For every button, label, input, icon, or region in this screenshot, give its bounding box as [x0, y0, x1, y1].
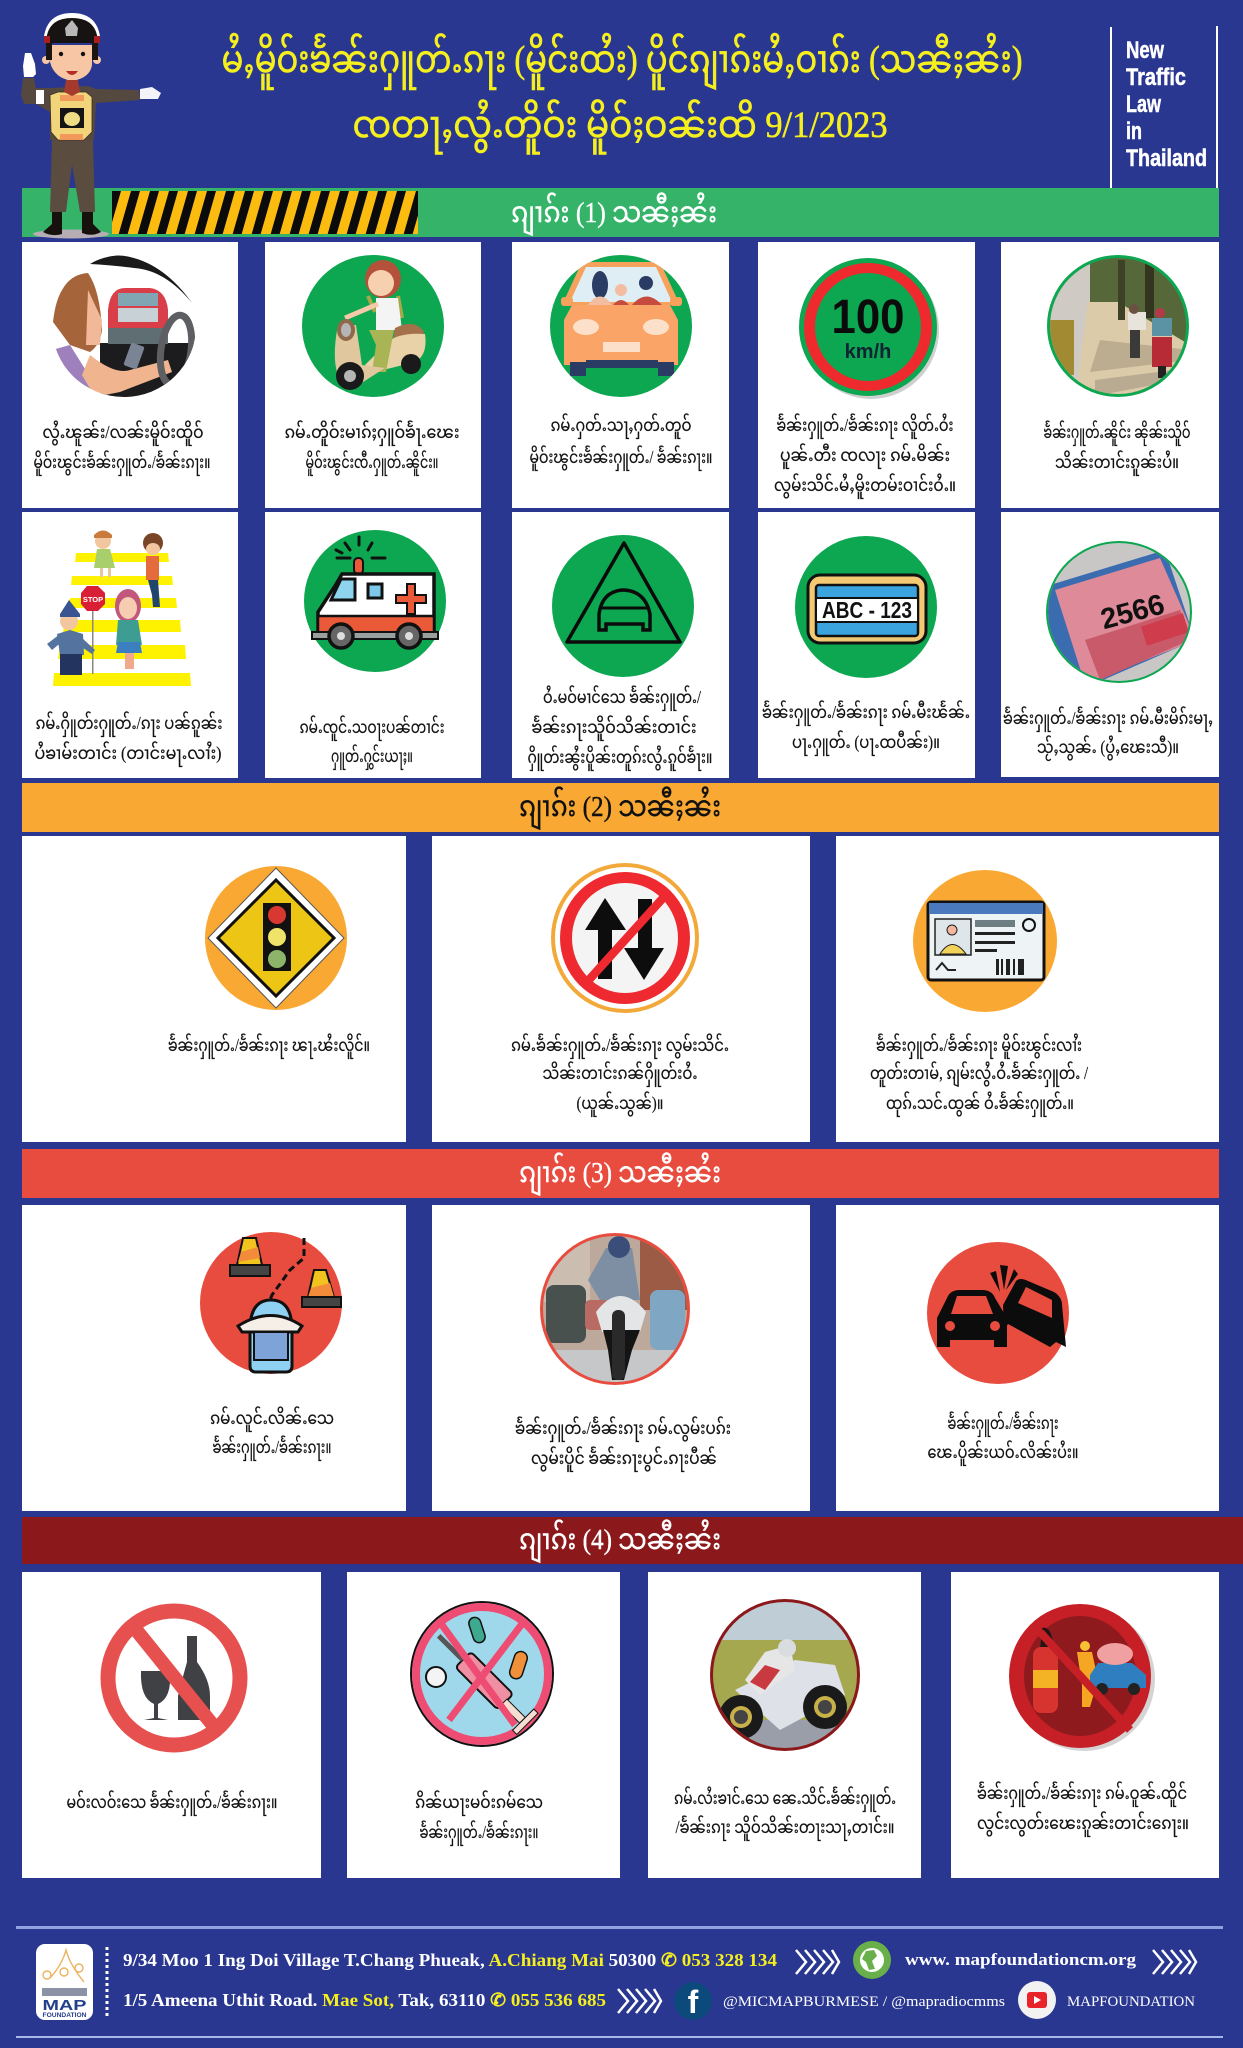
logo: MAP Foundation: FOUNDATION: [42, 2012, 87, 2019]
side label: New Traffic Law in Thailand: [1110, 26, 1218, 189]
caption: သိၼ်းတၢင်းၵူၼ်းပႆ။: [1055, 448, 1179, 477]
side label: New Traffic Law in Thailand: in: [1126, 118, 1142, 145]
side label: New Traffic Law in Thailand: New: [1126, 37, 1164, 64]
website: www. mapfoundationcm.org: [905, 1950, 1137, 1969]
section 4 heading bar: ၵျၢၵ်း (4) သၼီႈၼႆး: [519, 1519, 721, 1563]
icon: traffic light diamond sign: [205, 866, 347, 1010]
icon: woman using phone while driving: [52, 255, 196, 397]
caption: [210, 1404, 334, 1462]
panel: section 1 row 2 card 3: [512, 512, 729, 778]
panel: section 1 row 1 card 4: [758, 242, 975, 508]
section 3 heading bar: [22, 1149, 1219, 1198]
caption: ၶႅၼ်းႁူတ်ႉ/ၶႅၼ်းၵႃး။: [420, 1819, 538, 1847]
icon: speed limit 100 sign: km/h: [845, 341, 891, 363]
icon: no car fire: [1009, 1604, 1155, 1751]
caption: ၵမ်ႉတိူဝ်းမၢၵ်ႈႁူဝ်ၶႅႃႉၽေး: [284, 418, 460, 447]
caption: ၶႅၼ်းႁူတ်ႉ/ၶႅၼ်းၵႃး ၵမ်ႉမီးၽႅၼ်ႉ: [762, 698, 970, 727]
side label: New Traffic Law in Thailand: Law: [1126, 91, 1161, 118]
arrows: [618, 1989, 661, 2013]
caption: လွႆႉၽူၼ်း/လၼ်းမိူဝ်းထိူဝ်: [42, 418, 204, 447]
caption: တူတ်းတၢမ်, ၵျမ်းလွႆႉဝႆႉၶႅၼ်းႁူတ်ႉ /: [870, 1060, 1088, 1088]
social handles: @MICMAPBURMESE / @mapradiocmms: [723, 1994, 1005, 2010]
icon: swerving car and cones: [200, 1232, 342, 1374]
caption: [870, 1031, 1088, 1118]
caption: [1044, 418, 1190, 477]
caption: ၶႅၼ်းႁူတ်ႉ/ၶႅၼ်းၵႃး ၵမ်ႉလွမ်းပၵ်း: [515, 1415, 731, 1443]
caption: မိူဝ်းၽွင်းၸီႉႁူတ်ႉၼိူင်း။: [306, 448, 438, 477]
caption: [515, 1415, 731, 1473]
icon: facebook: [674, 1982, 712, 2020]
caption: ဝႆႉမဝ်မၢင်သေ ၶႅၼ်းႁူတ်ႉ/: [543, 684, 701, 712]
caption: /ၶႅၼ်းၵႃး သိူဝ်သိၼ်းတႃးသႃႇတၢင်း။: [676, 1813, 894, 1842]
icon: no drugs: [411, 1602, 553, 1746]
caption: ၽေႉပိူၼ်းယဝ်ႉလိၼ်းပႆး။: [928, 1438, 1078, 1467]
panel: section 2 card 3: [836, 836, 1219, 1142]
caption: (ယူၼ်ႉသွၼ်)။: [576, 1090, 664, 1118]
caption: ၶႅၼ်းႁူတ်ႉ/ၶႅၼ်းၵႃး ၵမ်ႉဝူၼ်ႉထိူင်: [977, 1779, 1187, 1808]
icon: no alcohol: [108, 1611, 240, 1745]
icon: speed limit 100 sign: 100: [832, 291, 904, 344]
caption: ၶႅၼ်းႁူတ်ႉ/ၶႅၼ်းၵႃး: [948, 1410, 1058, 1438]
caption: ပႃႉႁူတ်ႉ (ပႃႉထပီၼ်း)။: [792, 728, 940, 757]
caption: [1003, 704, 1213, 762]
icon: no overtaking sign: [551, 863, 699, 1013]
caption: မဝ်းလဝ်းသေ ၶႅၼ်းႁူတ်ႉ/ၶႅၼ်းၵႃး။: [66, 1789, 278, 1817]
panel: section 4 card 4: [951, 1572, 1219, 1878]
photo: motorbikes on footpath: [1045, 255, 1190, 400]
address line 1: 9/34 Moo 1 Ing Doi Village T.Chang Phueak, A.Chiang Mai 50300 ✆ 053 328 134: [123, 1950, 777, 1970]
caption: ၶႅၼ်းႁူတ်ႉ/ၶႅၼ်းၵႃး မိူဝ်းၽွင်းလၢႆး: [876, 1031, 1082, 1060]
address line 2: 1/5 Ameena Uthit Road. Mae Sot, Tak, 63110 ✆ 055 536 685: [123, 1990, 606, 2010]
panel: section 4 card 2: [347, 1572, 620, 1878]
caption: [977, 1779, 1189, 1838]
caption: ၶႅၼ်းႁူတ်ႉ/ၶႅၼ်းၵႃး လိူတ်ႉဝႆး: [776, 411, 954, 440]
caption: [300, 714, 444, 771]
icon: car crash: [927, 1242, 1069, 1384]
title: ၸတႃႇလွႆႉတိူဝ်း မိူဝ်ႈဝၼ်းထိ 9/1/2023: [352, 100, 888, 154]
arrows: [1153, 1950, 1196, 1974]
caption: ၵိၼ်ယႃးမဝ်းၵမ်သေ: [415, 1788, 543, 1817]
section 4 heading bar: [22, 1517, 1243, 1564]
caption: [530, 412, 712, 472]
caption: ထုၵ်ႉသင်ႉထွၼ် ဝႆႉၶႅၼ်းႁူတ်ႉ။: [886, 1090, 1074, 1118]
icon: zebra crossing with children: [47, 530, 191, 686]
logo: MAP Foundation: MAP: [42, 1997, 86, 2014]
caption: [528, 684, 712, 772]
icon: speed limit 100 sign: [799, 258, 939, 399]
panel: section 2 card 2: [432, 836, 810, 1142]
panel: section 1 row 1 card 2: [265, 242, 481, 508]
caption: ၵမ်ႉႁိူတ်းႁူတ်ႉ/ၵႃး ပၼ်ၵူၼ်း: [36, 709, 222, 738]
caption: ပူၼ်ႉတီး ၸလႃး ၵမ်ႉမိၼ်း: [780, 441, 950, 470]
section 1 heading bar: [22, 188, 1219, 237]
caption: [928, 1410, 1078, 1467]
photo: racing motorbike: [710, 1599, 860, 1752]
panel: section 3 card 1: [22, 1205, 406, 1511]
caption: ၵမ်ႉလူင်ႉလိၼ်ႉသေ: [210, 1404, 334, 1433]
caption: ၶႅၼ်းႁူတ်ႉၼိူင်း ၼိုၼ်းသိူဝ်: [1044, 418, 1190, 447]
caption: ၵမ်ႉၸူင်ႉသဝႃးပၼ်တၢင်း: [300, 714, 444, 742]
caption: ႁူတ်ႉႁွင်းယႃႈ။: [331, 743, 413, 771]
icon: girl on scooter: [302, 255, 444, 397]
caption: ၵမ်ႉႁတ်ႉသႃႇႁတ်ႉတူဝ်: [550, 412, 692, 440]
panel: section 1 row 1 card 5: [1001, 242, 1219, 508]
panel: section 1 row 1 card 3: [512, 242, 729, 508]
caption: ၶႅၼ်းႁူတ်ႉ/ၶႅၼ်းၵႃး ၽႃႉၽႆးလိူင်။: [168, 1031, 370, 1060]
logo: MAP Foundation: [36, 1944, 93, 2020]
side label: New Traffic Law in Thailand: Thailand: [1126, 145, 1207, 172]
icon: car with family: [550, 255, 692, 397]
panel: section 1 row 2 card 5: [1001, 512, 1219, 777]
caption: ၵမ်ႉလႆးၶၢင်ႉသေ ၼေႉသိင်ႉၶႅၼ်းႁူတ်ႉ: [674, 1784, 896, 1813]
panel: section 3 card 3: [836, 1205, 1219, 1511]
caption: [674, 1784, 896, 1842]
photo: road tax sticker: 2566: [1097, 589, 1168, 636]
side label: New Traffic Law in Thailand: Traffic: [1126, 64, 1186, 91]
icon: ambulance: [304, 530, 446, 672]
caption: ပႆၶၢမ်းတၢင်း (တၢင်းမႃႉလၢႆး): [34, 740, 222, 768]
caption: [511, 1031, 729, 1118]
icon: licence plate: ABC - 123: [822, 597, 912, 623]
caption: ႁိူတ်းၼွႆးပိူၼ်းတူၵ်းလွႆႉၵူဝ်ၶႅႃး။: [528, 743, 712, 772]
caption: လွမ်းပိူင် ၶႅၼ်းၵႃးပွင်ႉၵႃးပီၼ်: [531, 1444, 717, 1473]
caption: [415, 1788, 543, 1847]
icon: facebook: f: [688, 1984, 699, 2020]
caption: [762, 698, 970, 757]
caption: ၶႅၼ်းၵႃးသိူဝ်သိၼ်းတၢင်း: [532, 713, 696, 742]
section 2 heading bar: [22, 783, 1219, 832]
photo: motorbike wheelie: [540, 1232, 690, 1386]
section 3 heading bar: ၵျၢၵ်း (3) သၼီႈၼႆး: [519, 1152, 721, 1196]
icon: globe: [853, 1941, 891, 1979]
arrows: [796, 1950, 839, 1974]
caption: မိူဝ်းၽွင်းၶႅၼ်းႁူတ်ႉ/ ၶႅၼ်းၵႃး။: [530, 443, 712, 472]
caption: [34, 418, 210, 477]
footer: [16, 1926, 1223, 2038]
panel: section 4 card 1: [22, 1572, 321, 1878]
photo: road tax sticker: [1045, 540, 1196, 690]
caption: မိူဝ်းၽွင်းၶႅၼ်းႁူတ်ႉ/ၶႅၼ်းၵႃး။: [34, 448, 210, 477]
title: မႆႇမိူဝ်းၶႅၼ်းႁူတ်ႉၵႃး (မိူင်းထႆး) ပိူင်ၵျၢၵ်းမႆႇဝၢၵ်း (သၼီႈၼႆး): [222, 33, 1022, 90]
channel name: MAPFOUNDATION: [1067, 1994, 1196, 2010]
panel: section 1 row 2 card 2: [265, 512, 481, 778]
caption: [34, 709, 222, 768]
caption: ၵမ်ႉၶႅၼ်းႁူတ်ႉ/ၶႅၼ်းၵႃး လွမ်းသိင်ႉ: [511, 1031, 729, 1060]
panel: section 2 card 1: [22, 836, 406, 1142]
title: [222, 33, 1022, 154]
panel: section 1 row 1 card 1: [22, 242, 238, 508]
caption: သႂ်ႇသွၼ်ႉ (ပွႆႇၽေးသီ)။: [1037, 733, 1179, 762]
caption: [284, 418, 460, 477]
icon: warning triangle with car: [552, 535, 694, 677]
panel: section 3 card 2: [432, 1205, 810, 1511]
caption: သိၼ်းတၢင်းၵၼ်ႁိူတ်းဝႆႉ: [542, 1059, 698, 1088]
section 1 heading bar: ၵျၢၵ်း (1) သၼီႈၼႆး: [511, 192, 717, 236]
panel: section 1 row 2 card 4: [758, 512, 975, 778]
icon: licence plate: [795, 536, 937, 678]
caption: လွမ်းသိင်ႉမႆႇမိူးတမ်းဝၢင်းဝႆႉ။: [774, 471, 956, 500]
icon: zebra crossing with children: STOP: [83, 595, 103, 604]
icon: traffic policeman: [21, 13, 161, 238]
icon: driving licence card: [913, 870, 1057, 1012]
panel: section 1 row 2 card 1: [22, 512, 238, 778]
section 2 heading bar: ၵျၢၵ်း (2) သၼီႈၼႆး: [519, 786, 721, 830]
panel: section 4 card 3: [648, 1572, 921, 1878]
caption: ၶႅၼ်းႁူတ်ႉ/ၶႅၼ်းၵႃး။: [212, 1434, 332, 1462]
icon: youtube: [1018, 1981, 1056, 2019]
caption: လွင်းလွတ်းၽေးၵူၼ်းတၢင်းၵေႃး။: [977, 1810, 1189, 1838]
caption: [774, 411, 956, 500]
hazard stripes: [112, 191, 418, 234]
